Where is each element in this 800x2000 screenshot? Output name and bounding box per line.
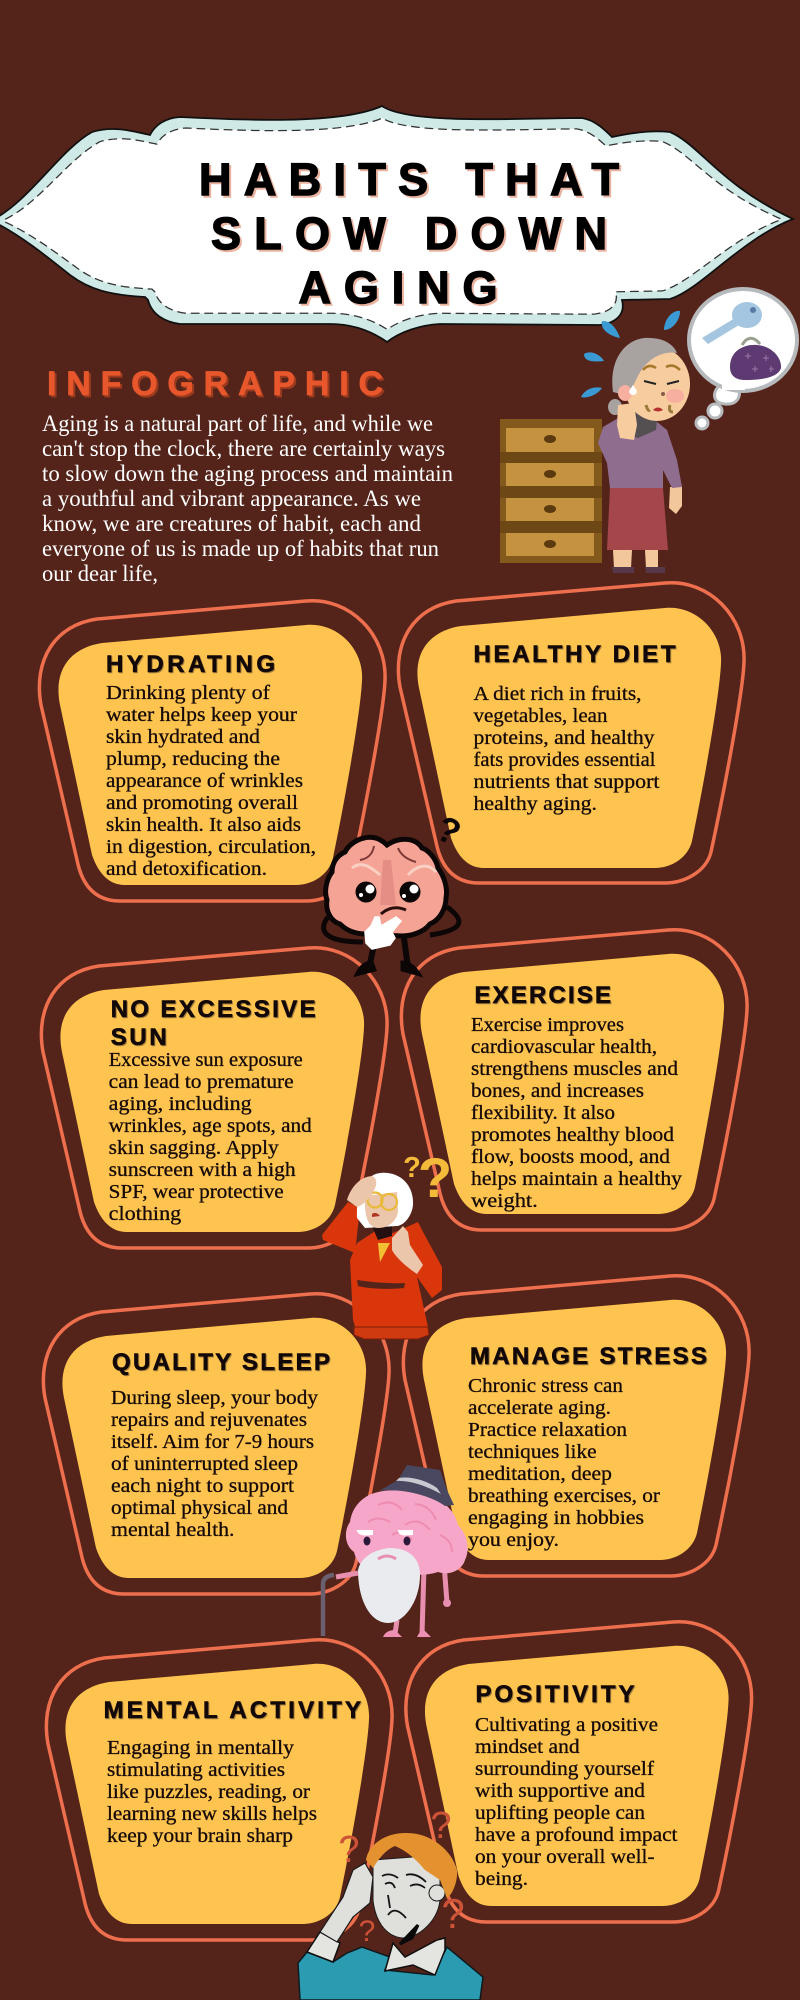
body text: A diet rich in fruits, bbox=[474, 683, 642, 705]
illustration: thinking brain mascot bbox=[324, 807, 467, 975]
body text: on your overall well- bbox=[475, 1846, 655, 1868]
body text: flexibility. It also bbox=[471, 1102, 615, 1124]
body text bbox=[109, 1049, 312, 1225]
body text: itself. Aim for 7-9 hours bbox=[111, 1431, 314, 1453]
body text: like puzzles, reading, or bbox=[107, 1781, 310, 1803]
body text: you enjoy. bbox=[468, 1529, 559, 1551]
body text: strengthens muscles and bbox=[471, 1058, 678, 1080]
body text: repairs and rejuvenates bbox=[111, 1409, 307, 1431]
body text: helps maintain a healthy bbox=[471, 1168, 683, 1190]
intro paragraph: to slow down the aging process and maintain bbox=[42, 461, 453, 486]
body text: with supportive and bbox=[475, 1780, 645, 1802]
illustration: confused woman in red hoodie bbox=[322, 1146, 452, 1339]
body text: Practice relaxation bbox=[468, 1419, 627, 1441]
body text: and promoting overall bbox=[106, 792, 298, 814]
body text: learning new skills helps bbox=[107, 1803, 317, 1825]
thought bubble with key and purse bbox=[689, 289, 797, 429]
intro paragraph: everyone of us is made up of habits that run bbox=[42, 536, 439, 561]
panel: positivity bbox=[406, 1622, 752, 1922]
body text bbox=[106, 682, 316, 880]
body text: clothing bbox=[109, 1203, 181, 1225]
illustration: dresser bbox=[500, 419, 602, 563]
body text: proteins, and healthy bbox=[474, 727, 655, 749]
body text: Excessive sun exposure bbox=[109, 1049, 303, 1071]
illustration: worried man bbox=[298, 1805, 483, 2000]
icon: red question marks: ? bbox=[359, 1915, 375, 1948]
body text: wrinkles, age spots, and bbox=[109, 1115, 312, 1137]
heading bbox=[111, 996, 316, 1051]
icon: red question marks: ? bbox=[430, 1805, 452, 1847]
icon: red question marks: ? bbox=[338, 1829, 360, 1871]
body text: Engaging in mentally bbox=[107, 1737, 295, 1759]
subtitle: infographic: INFOGRAPHIC bbox=[47, 365, 383, 403]
body text: Exercise improves bbox=[471, 1014, 624, 1036]
body text: water helps keep your bbox=[106, 704, 297, 726]
heading: QUALITY SLEEP bbox=[112, 1349, 330, 1376]
body text: accelerate aging. bbox=[468, 1397, 611, 1419]
body text: vegetables, lean bbox=[474, 705, 608, 727]
heading: EXERCISE bbox=[474, 982, 611, 1009]
icon: pointing hand bbox=[365, 917, 401, 949]
body text bbox=[471, 1014, 683, 1212]
body text: appearance of wrinkles bbox=[106, 770, 303, 792]
heading: HYDRATING bbox=[106, 651, 275, 678]
heading: SUN bbox=[111, 1024, 167, 1051]
eyes bbox=[356, 882, 420, 902]
title: HABITS THAT bbox=[199, 154, 619, 205]
illustration: old brain with hat and cane bbox=[323, 1465, 468, 1637]
body text: can lead to premature bbox=[109, 1071, 294, 1093]
body text: SPF, wear protective bbox=[109, 1181, 284, 1203]
body text: plump, reducing the bbox=[106, 748, 280, 770]
body text: surrounding yourself bbox=[475, 1758, 654, 1780]
title: AGING bbox=[298, 262, 498, 313]
body text: aging, including bbox=[109, 1093, 252, 1115]
title bbox=[199, 154, 619, 313]
heading: MENTAL ACTIVITY bbox=[104, 1697, 361, 1724]
body text: engaging in hobbies bbox=[468, 1507, 644, 1529]
illustration: elderly woman bbox=[598, 338, 690, 573]
intro paragraph: know, we are creatures of habit, each and bbox=[42, 511, 421, 536]
body text: Drinking plenty of bbox=[106, 682, 270, 704]
heading: HEALTHY DIET bbox=[474, 641, 676, 668]
icon: top hat bbox=[379, 1465, 454, 1506]
icon: glasses bbox=[368, 1192, 397, 1210]
intro paragraph: can't stop the clock, there are certainly ways bbox=[42, 436, 445, 461]
body text: During sleep, your body bbox=[111, 1387, 319, 1409]
body text: skin health. It also aids bbox=[106, 814, 301, 836]
body text: healthy aging. bbox=[474, 793, 597, 815]
body text: skin sagging. Apply bbox=[109, 1137, 279, 1159]
body text: weight. bbox=[471, 1190, 538, 1212]
intro paragraph: a youthful and vibrant appearance. As we bbox=[42, 486, 421, 511]
body text: mental health. bbox=[111, 1519, 234, 1541]
body text: optimal physical and bbox=[111, 1497, 288, 1519]
body text: uplifting people can bbox=[475, 1802, 645, 1824]
body text bbox=[468, 1375, 660, 1551]
panel: quality sleep bbox=[43, 1294, 389, 1594]
body text: sunscreen with a high bbox=[109, 1159, 296, 1181]
body text: bones, and increases bbox=[471, 1080, 644, 1102]
body text: stimulating activities bbox=[107, 1759, 285, 1781]
intro paragraph bbox=[42, 411, 453, 586]
icon: coin purse bbox=[730, 338, 781, 380]
body text: keep your brain sharp bbox=[107, 1825, 293, 1847]
body text: in digestion, circulation, bbox=[106, 836, 316, 858]
body text: cardiovascular health, bbox=[471, 1036, 657, 1058]
icon: yellow question marks bbox=[403, 1146, 452, 1209]
panel: healthy diet bbox=[398, 583, 744, 883]
intro paragraph: our dear life, bbox=[42, 561, 158, 586]
body text bbox=[474, 683, 660, 815]
body text: techniques like bbox=[468, 1441, 597, 1463]
body text: of uninterrupted sleep bbox=[111, 1453, 298, 1475]
body text: breathing exercises, or bbox=[468, 1485, 660, 1507]
panel: mental activity bbox=[46, 1640, 392, 1940]
icon: question mark: ? bbox=[430, 807, 467, 854]
icon: yellow question marks: ? bbox=[418, 1146, 452, 1209]
heading: NO EXCESSIVE bbox=[111, 996, 316, 1023]
body text: and detoxification. bbox=[106, 858, 267, 880]
body text: fats provides essential bbox=[474, 749, 656, 771]
icon: yellow question marks: ? bbox=[403, 1152, 421, 1184]
body text: each night to support bbox=[111, 1475, 294, 1497]
panel: hydrating bbox=[39, 601, 385, 901]
icon: red question marks bbox=[338, 1805, 465, 1948]
panel: no excessive sun bbox=[41, 948, 387, 1248]
panel: exercise bbox=[401, 930, 747, 1230]
body text: skin hydrated and bbox=[106, 726, 260, 748]
intro paragraph: Aging is a natural part of life, and while we bbox=[42, 411, 433, 436]
body text: meditation, deep bbox=[468, 1463, 612, 1485]
icon: red question marks: ? bbox=[441, 1890, 465, 1937]
title: SLOW DOWN bbox=[211, 208, 607, 259]
heading: MANAGE STRESS bbox=[470, 1343, 707, 1370]
body text bbox=[107, 1737, 317, 1847]
body text: mindset and bbox=[475, 1736, 580, 1758]
body text: Chronic stress can bbox=[468, 1375, 623, 1397]
body text: being. bbox=[475, 1868, 528, 1890]
icon: sweat drops bbox=[581, 311, 680, 397]
icon: key bbox=[702, 302, 762, 344]
heading: POSITIVITY bbox=[476, 1681, 634, 1708]
panel: manage stress bbox=[403, 1276, 749, 1576]
icon: cane bbox=[323, 1575, 334, 1636]
body text: have a profound impact bbox=[475, 1824, 678, 1846]
title banner bbox=[0, 106, 793, 342]
body text: Cultivating a positive bbox=[475, 1714, 658, 1736]
body text: flow, boosts mood, and bbox=[471, 1146, 670, 1168]
body text bbox=[111, 1387, 319, 1541]
body text: promotes healthy blood bbox=[471, 1124, 674, 1146]
body text: nutrients that support bbox=[474, 771, 660, 793]
body text bbox=[475, 1714, 678, 1890]
